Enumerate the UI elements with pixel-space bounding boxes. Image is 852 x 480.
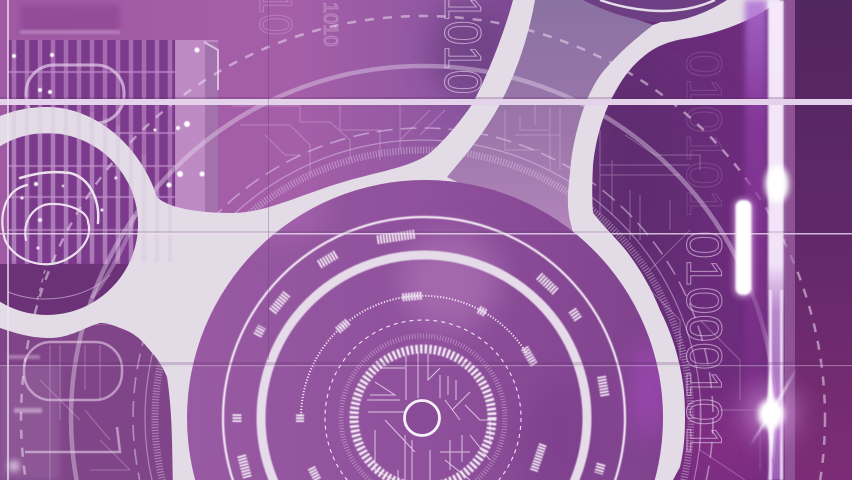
left disc radar arcs — [2, 172, 98, 264]
outer block markers — [237, 234, 605, 477]
lower left city area — [0, 325, 172, 480]
faint tick ring — [341, 336, 505, 480]
binary digits — [24, 0, 732, 453]
circuit traces background — [40, 105, 760, 480]
main tick ring — [354, 349, 492, 480]
building stripes on white band — [14, 108, 170, 262]
inner dotted arc — [301, 296, 527, 416]
dashed ring — [325, 320, 521, 480]
outer thin ring — [223, 217, 625, 480]
building grid — [8, 5, 218, 264]
large digit: upper left — [26, 65, 124, 123]
light wedge between bands — [447, 0, 653, 240]
large digit: lower left — [24, 342, 122, 400]
top disc — [583, 0, 727, 22]
centre ring — [404, 400, 440, 436]
disc soft highlights — [210, 190, 664, 480]
digit column: right faint: 010101 — [676, 50, 732, 217]
digit column: top left: 1010 — [319, 2, 341, 46]
circuit traces — [367, 352, 490, 480]
large digit: lower left L — [25, 427, 120, 452]
light blob: streak — [765, 165, 789, 203]
thick ring — [261, 255, 587, 480]
light blob: left — [733, 198, 754, 298]
inner block markers — [300, 296, 543, 480]
right light streak — [745, 0, 795, 480]
lens flare star — [744, 368, 797, 460]
lower left disc shade — [0, 264, 140, 324]
central disc — [187, 180, 664, 480]
left disc thin dashed arcs — [8, 215, 135, 305]
digit column: right: 01000101 — [676, 231, 732, 453]
city light sparkles — [12, 48, 204, 250]
